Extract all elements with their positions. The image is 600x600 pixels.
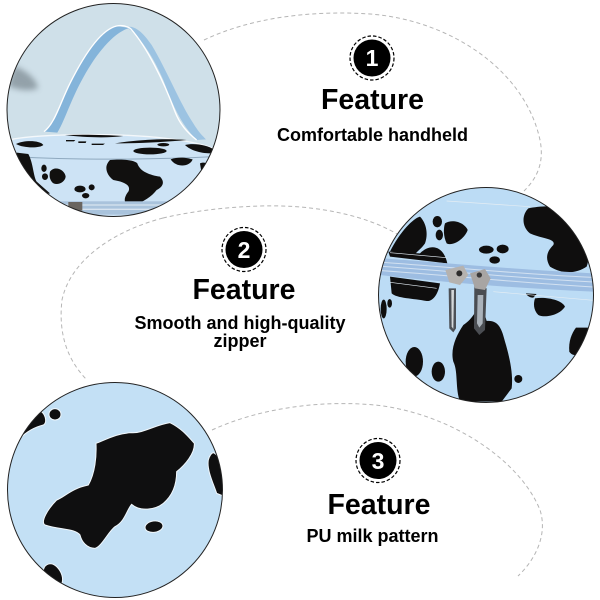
badge 2 xyxy=(222,228,266,272)
badge 1 xyxy=(350,36,394,80)
badge 3: 3 xyxy=(372,448,384,474)
photo circle: milk pattern xyxy=(0,375,230,600)
text: smooth zipper: zipper xyxy=(213,330,266,350)
badge 1: 1 xyxy=(366,45,379,71)
photo circle: bag handle xyxy=(6,3,220,217)
dashed connector: feature 2 xyxy=(61,206,397,379)
heading: feature 1: Feature xyxy=(321,84,424,116)
badge 3 xyxy=(356,438,400,482)
text: comfortable handheld: Comfortable handheld xyxy=(277,125,468,145)
text: smooth zipper: Smooth and high-quality xyxy=(134,312,345,332)
badge 2: 2 xyxy=(238,237,250,263)
heading: feature 2: Feature xyxy=(193,274,295,306)
text: PU milk pattern: PU milk pattern xyxy=(306,526,439,546)
heading: feature 3: Feature xyxy=(328,489,430,521)
text: smooth zipper xyxy=(134,312,346,351)
dashed connector: feature 1 xyxy=(204,13,541,191)
dashed connector: feature 3 xyxy=(212,404,542,576)
photo circle: zipper xyxy=(370,185,600,405)
